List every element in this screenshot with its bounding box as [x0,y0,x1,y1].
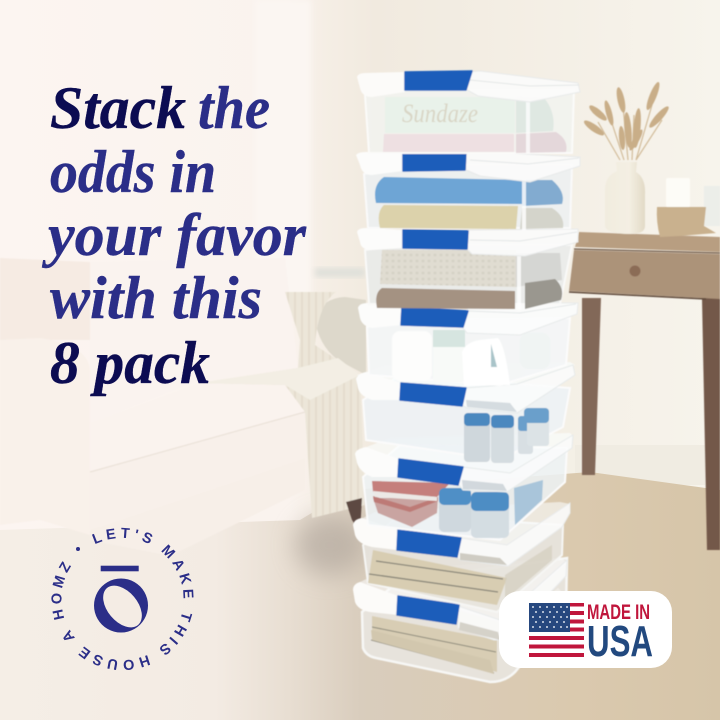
jars [439,490,471,532]
blue towel [375,177,522,204]
lid top plate [356,558,568,622]
lid top plate [357,362,575,388]
box 6 [355,433,573,540]
mint towel [385,97,515,133]
lid left [355,447,399,477]
sofa arm left [0,338,90,535]
towel brand text: Sundaze [402,99,478,128]
circular slogan: LET'S MAKE THIS HOUSE A HOMZ [51,528,194,670]
box 1 [357,71,580,153]
slogan dot [76,547,80,551]
drawer [569,250,720,299]
lid right [457,503,570,566]
lid left [357,228,403,250]
logo ring [94,578,148,632]
clasp [397,530,461,557]
bottles [392,331,432,381]
USA label: USA [587,617,653,666]
sofa [0,258,366,556]
lid right [462,303,578,335]
headline [42,75,307,396]
jars [464,414,490,462]
round brand logo [51,528,194,670]
headline word: Stack: Stack [50,75,186,141]
floor [0,472,720,720]
badge background [499,591,672,668]
side table with decor [569,81,720,550]
clasp [400,383,466,406]
sofa arm right [315,297,366,375]
headline line: 8 pack: 8 pack [50,330,210,396]
throw blanket [200,292,365,518]
headline line: with this: with this [50,265,262,331]
lid top plate [355,502,570,545]
pink towel [383,134,514,152]
wall shadow behind stack [315,268,365,277]
clasp [397,596,459,624]
clasp [401,307,468,327]
lid right [467,71,580,102]
sofa leg [346,498,362,532]
candle [666,178,690,207]
headline line: odds in: odds in [50,139,216,205]
box 2 [356,151,580,230]
baseboard [575,445,705,485]
pillow [90,258,298,423]
lid right [467,229,578,256]
red containers [372,481,450,497]
lid right [466,151,580,182]
lid right [458,560,567,640]
lid left [353,518,398,550]
brown towel [376,288,515,309]
box 5 [356,362,575,463]
headline word: the: the [198,75,270,141]
table legs [582,298,601,475]
stack of eight storage boxes [353,71,580,682]
box 3 [357,228,578,310]
floor shadow under sofa [295,515,365,575]
lid left [356,152,403,175]
lid left [358,303,402,328]
lid right [458,435,573,492]
headline line: your favor: your favor [42,202,307,268]
knit towel [380,250,516,287]
seat front [90,412,305,530]
lid left [356,372,401,400]
lid left [353,582,398,615]
clasp [403,230,468,249]
logo macron [101,566,139,571]
basket [657,207,716,237]
made in USA badge [499,591,672,668]
box 7 [353,502,570,612]
lid top plate [356,433,573,473]
books [372,616,497,672]
clasp [403,151,466,171]
vase [605,162,645,234]
table top [575,232,720,252]
lid left [357,72,405,97]
tan towel [379,205,518,229]
lid right [462,365,575,413]
box 8 [353,558,568,682]
seat top [90,383,305,472]
books [368,550,507,605]
left cushion [0,258,90,340]
american flag [529,603,584,657]
clasp [398,459,463,485]
curtain panel [255,0,311,300]
box 4 [358,303,578,386]
MADE IN label: MADE IN [587,601,650,624]
dried wheat [582,81,671,160]
clasp [405,71,472,90]
